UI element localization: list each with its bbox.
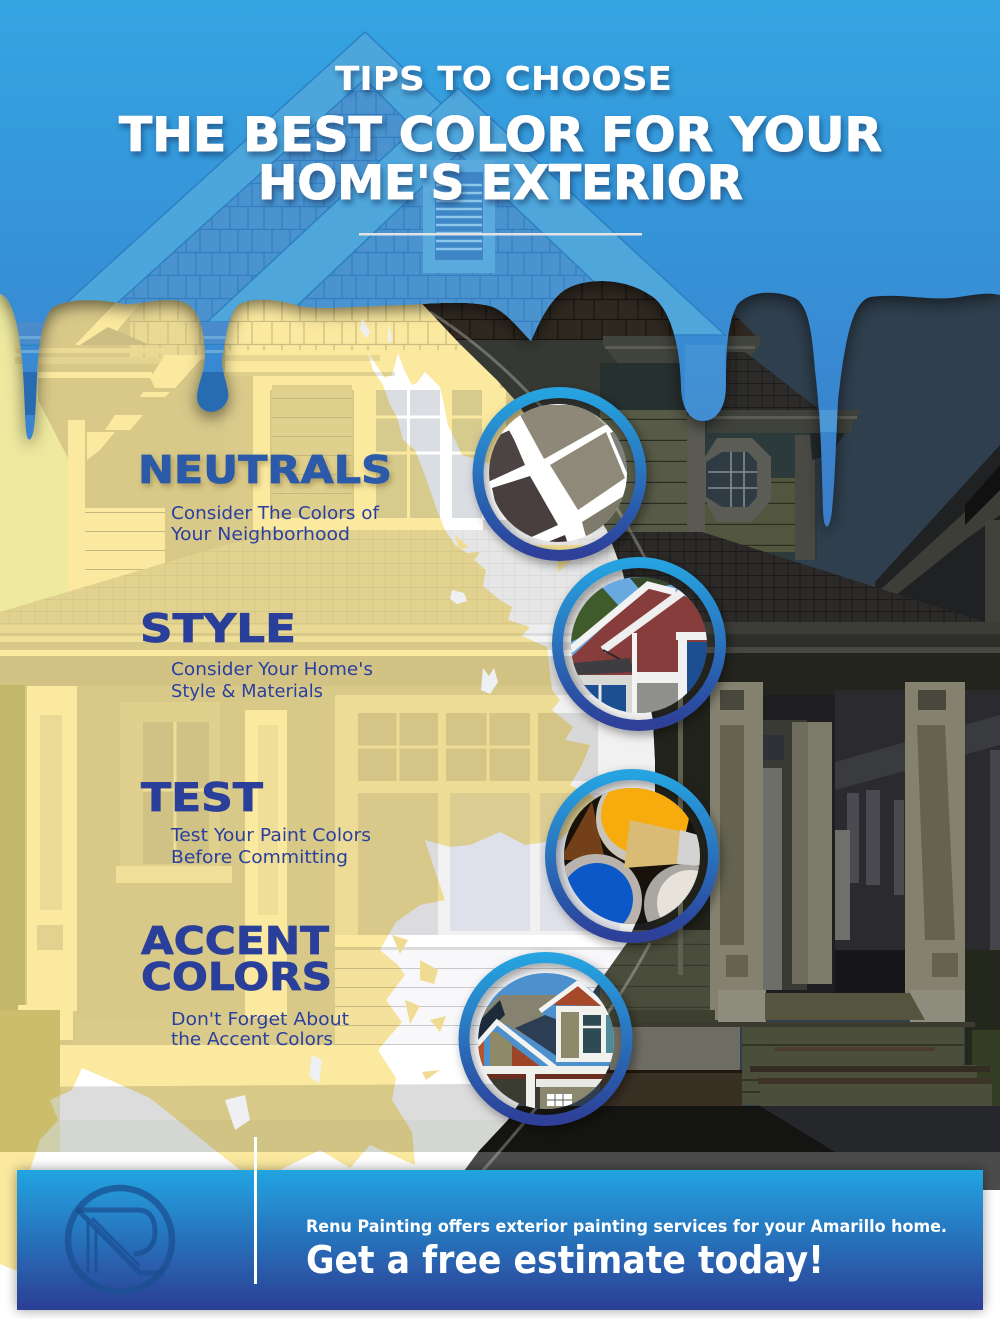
title kicker: TIPS TO CHOOSE	[335, 59, 672, 98]
yellow paint layer with splatter edge	[0, 280, 600, 1272]
faded gable house inside the blue	[0, 32, 840, 445]
brown skirt	[600, 1070, 742, 1106]
upper shingle gable	[400, 280, 760, 340]
side wall	[835, 690, 1000, 950]
tip: accent colors: Don't Forget About	[171, 1010, 349, 1030]
left porch	[0, 685, 25, 1015]
tip: test: Before Committing	[171, 848, 348, 868]
tower with window	[687, 410, 817, 560]
deck floor	[765, 993, 925, 1020]
upper gable	[130, 300, 210, 360]
left porch column	[710, 682, 766, 1022]
upper light wall	[225, 300, 500, 350]
tip: accent colors	[141, 919, 349, 1050]
circle: paint cans	[550, 772, 726, 946]
lower siding	[600, 930, 710, 1010]
white splatter flecks on the paint	[225, 318, 498, 1130]
main roof	[608, 532, 984, 622]
left roof	[0, 530, 660, 625]
title block	[119, 59, 882, 211]
front gable trim	[207, 88, 725, 335]
tip: accent colors: the Accent Colors	[171, 1030, 333, 1050]
right gable background	[875, 445, 1000, 625]
tip: neutrals	[138, 448, 392, 545]
porch dark base	[604, 698, 835, 993]
grey band under photo	[450, 1152, 1000, 1190]
small hip roof	[720, 352, 819, 410]
title divider	[359, 233, 642, 236]
upper cornice right	[707, 410, 862, 433]
ground	[478, 1106, 835, 1152]
circle: accent house	[464, 958, 627, 1120]
tip: neutrals: Your Neighborhood	[170, 525, 350, 545]
tip: test	[141, 776, 371, 868]
thin arc lines	[430, 312, 650, 1185]
title line two: HOME'S EXTERIOR	[258, 156, 743, 211]
tip: neutrals: Consider The Colors of	[171, 504, 380, 524]
heading: neutrals: NEUTRALS	[138, 448, 392, 492]
pale left wall	[0, 280, 68, 612]
heading: style: STYLE	[140, 607, 296, 652]
footer headline: Get a free estimate today!	[306, 1238, 824, 1282]
yellow flecks on the white	[392, 535, 590, 1080]
tip: style: Consider Your Home's	[171, 660, 373, 680]
heading: accent colors	[141, 919, 332, 999]
footer divider	[254, 1137, 257, 1284]
cornice bands in drips	[16, 322, 229, 344]
right porch column	[905, 682, 970, 1022]
right dark house photo	[400, 280, 1000, 1160]
deck band	[610, 1025, 740, 1070]
cornice	[603, 336, 760, 363]
icon: Renu Painting logo	[68, 1188, 172, 1292]
tip: style: Style & Materials	[171, 682, 323, 702]
octagon window	[705, 438, 771, 522]
blue header with paint drips	[0, 0, 1000, 527]
footer text line: Renu Painting offers exterior painting services for your Amarillo home.	[306, 1217, 947, 1237]
roof fascia	[703, 622, 1000, 634]
tip: style	[140, 607, 373, 702]
gable vent	[423, 160, 495, 273]
title line one: THE BEST COLOR FOR YOUR	[119, 108, 882, 163]
front gable shingles	[298, 154, 592, 341]
circle: style house	[558, 562, 720, 726]
left house photo (light side)	[0, 280, 680, 1152]
footer call to action	[17, 1137, 983, 1310]
stairs	[742, 1027, 992, 1108]
upper tower wall	[460, 340, 618, 532]
back gable shingles	[118, 82, 576, 345]
back gable trim	[20, 32, 450, 345]
heading: accent colors: COLORS	[141, 955, 332, 999]
heading: test: TEST	[141, 776, 263, 821]
circle: neutrals swatches	[478, 392, 641, 556]
tip: test: Test Your Paint Colors	[170, 826, 371, 846]
heading: accent colors: ACCENT	[141, 919, 329, 963]
door bay	[763, 720, 807, 990]
porch soffit	[690, 653, 1000, 695]
grass and bushes	[965, 950, 1000, 1065]
